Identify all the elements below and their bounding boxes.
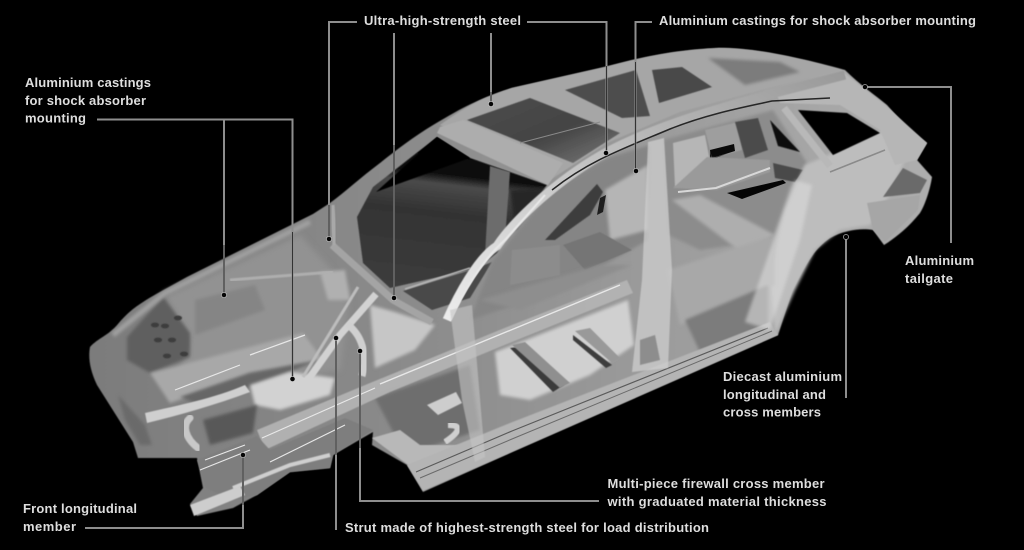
white hose <box>186 418 198 448</box>
deck <box>673 157 770 190</box>
curved white <box>445 425 458 442</box>
rear lower dark <box>685 285 768 352</box>
box 2 <box>510 245 560 285</box>
door sill front light <box>372 430 460 470</box>
side rail <box>447 75 845 320</box>
line: diecast <box>845 237 847 398</box>
floor <box>372 235 775 470</box>
rear door opening and interior <box>663 110 807 255</box>
line: ultra-high-strength steel <box>329 22 606 298</box>
label: aluminium castings left <box>25 75 151 126</box>
windshield right dark <box>510 188 545 230</box>
roof surface <box>440 48 840 180</box>
lower A pillar <box>332 205 335 245</box>
rail lower highlight <box>450 195 545 320</box>
tail floor <box>867 195 920 242</box>
sill <box>407 322 778 491</box>
B pillar dark inner <box>640 335 660 365</box>
dark band under plate <box>180 360 320 405</box>
rail shadow <box>552 98 830 190</box>
line cores over car <box>224 62 636 505</box>
rear structure <box>735 118 768 158</box>
black hole <box>710 143 732 160</box>
label: front longitudinal member: member <box>23 519 76 534</box>
front rim shade <box>118 395 152 445</box>
line: left shock absorber castings <box>97 120 292 379</box>
shock tower <box>673 135 713 187</box>
roof <box>437 48 840 185</box>
cross member top 2 <box>575 328 620 363</box>
C pillar <box>745 180 812 330</box>
label: aluminium castings top: Aluminium castings for shock absorber mounting <box>659 13 976 28</box>
label: strut: Strut made of highest-strength steel for load distribution <box>345 520 709 535</box>
bright highlights <box>175 335 375 470</box>
glass reflection <box>520 122 600 143</box>
label: multi-piece firewall <box>606 476 826 509</box>
front door opening <box>470 145 650 320</box>
silhouette <box>89 48 932 516</box>
cross member 1 <box>510 347 564 392</box>
cowl stripe <box>405 268 470 289</box>
band <box>672 195 775 255</box>
front bumper bar <box>190 486 245 516</box>
strut <box>305 294 376 384</box>
main longitudinal beam <box>257 280 633 450</box>
sunroof panel 1 <box>467 98 620 163</box>
label: aluminium castings left: mounting <box>25 110 86 126</box>
upper cowl bright <box>320 270 350 300</box>
cowl bar <box>332 245 432 322</box>
label: aluminium tailgate <box>905 253 974 286</box>
label: aluminium castings left: for shock absorber <box>25 93 146 108</box>
firewall bright area <box>370 305 435 368</box>
sunroof panel 3 <box>652 67 712 103</box>
front plate <box>150 333 323 403</box>
deck edge <box>678 168 770 192</box>
upper darker band <box>480 265 632 310</box>
lower hose <box>233 455 330 488</box>
upper interior wall <box>705 122 742 158</box>
black hole over wall <box>710 144 735 158</box>
cross bar <box>145 385 250 423</box>
cross member 2 <box>573 335 612 368</box>
label: diecast aluminium: Diecast aluminium <box>723 369 842 384</box>
dark door glass <box>545 184 603 240</box>
seat box <box>563 232 632 270</box>
line: firewall <box>360 351 599 501</box>
windshield pillar ghost <box>485 166 510 255</box>
dark engine box <box>203 405 257 445</box>
rear quarter window <box>798 110 880 155</box>
B pillar <box>632 138 672 372</box>
rear fender <box>770 130 905 335</box>
windshield black upper triangle <box>376 137 470 192</box>
opening base <box>663 110 807 250</box>
dark slot <box>597 195 606 215</box>
floor left dark <box>375 365 480 450</box>
windshield opening <box>357 137 547 288</box>
dark nose panel <box>127 297 190 373</box>
nose holes <box>151 316 188 358</box>
lower front structure <box>197 418 373 500</box>
bright engine parts <box>250 372 335 410</box>
D pillar bar <box>784 108 830 166</box>
label: diecast aluminium: cross members <box>723 404 821 420</box>
sunroof panel 2 <box>565 70 650 118</box>
label: diecast aluminium <box>723 369 842 420</box>
groove lower <box>420 331 772 478</box>
leader lines <box>85 22 951 530</box>
quarter line <box>830 150 885 172</box>
label: aluminium tailgate: Aluminium <box>905 253 974 268</box>
main bright floor <box>495 300 634 400</box>
front door pillar <box>450 305 485 462</box>
front hood and engine bay <box>113 222 435 448</box>
sill body <box>407 322 778 491</box>
line: tailgate <box>865 87 951 243</box>
car body shell <box>89 48 932 516</box>
white box <box>427 392 462 415</box>
rear upper pillar <box>775 72 927 165</box>
label: aluminium tailgate: tailgate <box>905 271 953 286</box>
small window <box>770 120 800 152</box>
sunroof panel 4 <box>708 58 800 85</box>
groove upper <box>416 328 768 472</box>
right dark part <box>773 163 803 182</box>
line: strut <box>335 338 337 530</box>
hood edge <box>113 222 310 335</box>
horizontal strut bar <box>230 272 333 280</box>
anchor dots <box>221 84 868 458</box>
label: multi-piece firewall: with graduated material thickness <box>606 494 826 509</box>
label: diecast aluminium: longitudinal and <box>723 387 826 402</box>
front cross member <box>437 120 563 185</box>
label: front longitudinal member: Front longitudinal <box>23 501 137 516</box>
firewall arch <box>347 324 364 376</box>
rear seat band <box>668 235 775 325</box>
label: front longitudinal member <box>23 501 137 534</box>
door interior <box>470 145 650 320</box>
cowl lower panel <box>403 262 492 310</box>
inner panel <box>605 165 648 240</box>
label: aluminium castings left: Aluminium castings <box>25 75 151 90</box>
line: front longitudinal <box>85 455 243 528</box>
tower <box>195 285 265 335</box>
tail interior <box>883 168 927 197</box>
cross member top 1 <box>512 342 570 388</box>
thin strut <box>303 287 358 377</box>
floor hole <box>727 180 786 199</box>
beam stripe <box>380 285 620 384</box>
label: multi-piece firewall: Multi-piece firewall cross member <box>608 476 824 491</box>
line: upper shock absorber castings <box>636 22 652 171</box>
label: ultra-high-strength steel: Ultra-high-strength steel <box>364 13 521 28</box>
hood surface <box>165 235 350 400</box>
